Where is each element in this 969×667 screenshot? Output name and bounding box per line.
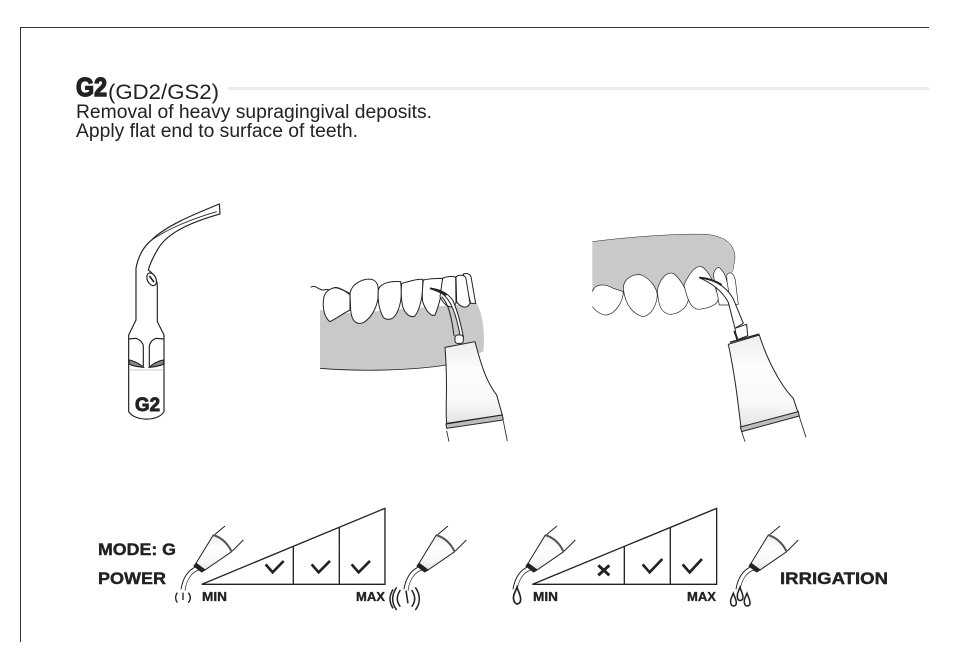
illustration: upper teeth with handpiece bbox=[592, 234, 806, 442]
title bbox=[76, 72, 929, 104]
check marks bbox=[266, 561, 370, 572]
teeth bbox=[592, 266, 738, 317]
gum bbox=[320, 303, 484, 371]
icon: G2 scaler tip bbox=[129, 204, 220, 419]
tip label: G2 bbox=[135, 395, 160, 416]
icon: handpiece low power bbox=[176, 526, 243, 603]
illustration: lower teeth with handpiece bbox=[311, 273, 507, 442]
label: irrigation: IRRIGATION bbox=[780, 569, 888, 588]
check marks bbox=[643, 559, 702, 572]
chart: power triangle: MIN bbox=[202, 590, 227, 604]
teeth bbox=[311, 273, 476, 323]
description text: Apply flat end to surface of teeth. bbox=[76, 121, 358, 142]
title: G2 bbox=[76, 72, 107, 102]
chart: irrigation triangle: MIN bbox=[533, 590, 558, 604]
description text bbox=[76, 102, 432, 142]
chart: irrigation triangle: MAX bbox=[687, 590, 717, 604]
instrument tip bbox=[430, 288, 463, 337]
label: power: POWER bbox=[98, 569, 166, 588]
handpiece bbox=[728, 335, 798, 428]
chart: power triangle: MAX bbox=[356, 590, 386, 604]
icon: handpiece high power bbox=[390, 526, 466, 610]
label: mode: MODE: G bbox=[98, 541, 176, 559]
icon: handpiece low irrigation bbox=[513, 526, 575, 604]
gum bbox=[592, 234, 735, 295]
cross mark bbox=[598, 565, 609, 575]
chart: power triangle bbox=[202, 508, 386, 604]
instrument tip bbox=[699, 278, 743, 328]
description text: Removal of heavy supragingival deposits. bbox=[76, 102, 432, 123]
title: (GD2/GS2) bbox=[108, 81, 219, 104]
chart: irrigation triangle bbox=[532, 508, 717, 604]
icon: handpiece high irrigation bbox=[731, 526, 798, 606]
handpiece bbox=[445, 342, 502, 423]
